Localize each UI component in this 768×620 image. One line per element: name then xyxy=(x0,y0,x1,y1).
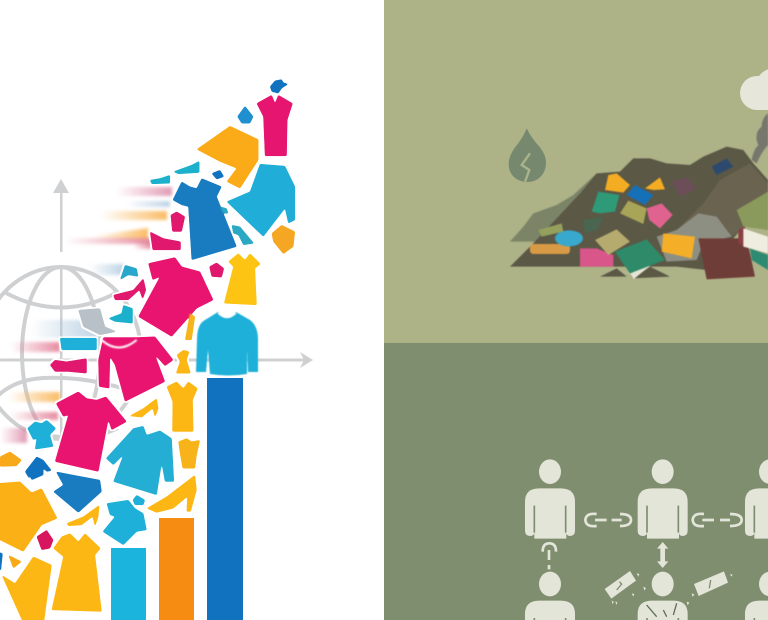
icon: tiny pink shirt xyxy=(209,263,224,277)
icon: small pink shirt xyxy=(171,212,185,232)
pile back slope xyxy=(510,173,603,242)
icon: lower yellow dress xyxy=(52,533,102,612)
icon: person top left xyxy=(525,459,575,539)
icon: person bottom right xyxy=(745,572,768,620)
icon: pink dress xyxy=(257,95,293,156)
icon: small yellow top xyxy=(178,438,200,468)
icon: pink flower xyxy=(37,530,53,550)
vertical link xyxy=(543,543,556,569)
panel: textile waste landfill xyxy=(384,0,768,343)
illustration: trash heap xyxy=(510,113,768,279)
orange scrap left xyxy=(605,173,630,193)
icon: person top middle xyxy=(638,459,688,539)
icon: pink heel xyxy=(113,278,146,300)
icon: small pink garment xyxy=(50,358,87,373)
green book xyxy=(615,239,665,273)
icon: small blue shirt xyxy=(237,106,253,123)
icon: teal tee xyxy=(103,500,147,545)
chain link left xyxy=(585,514,631,526)
icon: orange shorts xyxy=(197,126,258,188)
ground shards xyxy=(600,267,670,278)
icon: teal sneaker xyxy=(108,305,133,323)
pink cloth xyxy=(580,248,613,267)
icon: pink shoe xyxy=(150,232,181,250)
icon: broken link right xyxy=(694,571,728,596)
icon: teal knot xyxy=(133,495,145,505)
icon: tiny orange scrap xyxy=(8,555,22,568)
double arrow xyxy=(657,542,668,568)
smoke plume xyxy=(752,113,768,163)
icon: orange heel xyxy=(129,398,158,417)
icon: orange trousers xyxy=(2,557,52,620)
icon: teal jacket xyxy=(227,164,295,237)
icon: pink tee xyxy=(55,392,127,472)
icon: big pink tee xyxy=(138,257,213,337)
maroon box xyxy=(698,238,755,279)
icon: person top right xyxy=(745,459,768,539)
dark blue cloth xyxy=(712,158,733,175)
icon: yellow heel xyxy=(147,475,197,513)
blue folded cloth xyxy=(627,185,653,205)
dark green cloth xyxy=(583,217,603,233)
icon: small blue cap xyxy=(212,170,224,179)
cracks on torso xyxy=(647,603,677,617)
icon: big orange tee xyxy=(0,482,57,552)
stacked fabric xyxy=(737,192,768,270)
olive folded cloth xyxy=(620,201,647,224)
pink sweater collar xyxy=(102,340,137,347)
grey rock xyxy=(657,213,732,262)
teal oval cloth xyxy=(555,230,583,246)
icon: globe xyxy=(0,267,141,439)
icon: small yellow item xyxy=(185,313,195,340)
bar chart xyxy=(111,378,243,620)
icon: yellow dress xyxy=(167,382,198,432)
icon: teal sweater xyxy=(196,312,258,376)
white scrap xyxy=(617,264,650,279)
panel: rising clothing consumption xyxy=(0,0,384,620)
icon: pink sweater xyxy=(98,337,173,402)
icon: person bottom left xyxy=(525,572,575,620)
icon: small teal shirt xyxy=(27,420,56,449)
icon: small orange heel xyxy=(67,505,99,527)
icon: cracked water drop xyxy=(509,128,546,182)
icon: tiny yellow dress xyxy=(176,350,191,373)
pile main mass xyxy=(510,147,768,270)
icon: blue sweater xyxy=(25,457,52,480)
clothing cluster, lower xyxy=(0,337,200,620)
icon: person bottom middle xyxy=(638,572,688,620)
icon: yellow dress xyxy=(224,253,261,305)
panel: broken social connections xyxy=(384,343,768,620)
people network xyxy=(525,459,768,620)
chain link right xyxy=(693,514,742,526)
icon: teal shoes xyxy=(150,161,199,184)
icon: blue tee xyxy=(53,472,102,513)
icon: broken link left xyxy=(605,571,636,599)
orange strip xyxy=(530,244,570,254)
icon: blue dress xyxy=(173,178,237,260)
icon: small orange top xyxy=(272,225,295,254)
green folded cloth xyxy=(592,192,619,213)
icon: teal long shirt xyxy=(106,426,174,495)
chart axes with arrows xyxy=(0,179,313,440)
icon: gray garment xyxy=(78,308,117,335)
icon: blue sliver xyxy=(0,552,3,570)
icon: teal boot xyxy=(120,265,138,280)
icon: cloud xyxy=(740,68,768,110)
olive cloth xyxy=(538,223,563,237)
speed streaks xyxy=(0,187,172,443)
icon: small teal folded top xyxy=(60,338,97,350)
beige cloth xyxy=(595,229,630,255)
clothing cluster, upper xyxy=(78,79,295,340)
orange scrap right xyxy=(645,177,665,190)
pink folded cloth xyxy=(647,203,673,228)
yellow torn cloth xyxy=(662,233,695,258)
debris xyxy=(612,573,733,605)
icon: blue hat xyxy=(270,79,288,93)
icon: small teal items xyxy=(220,207,254,245)
crack in links xyxy=(617,580,711,590)
purple cloth xyxy=(672,177,697,197)
pile right ridge xyxy=(677,163,768,237)
icon: orange garment at edge xyxy=(0,452,22,467)
